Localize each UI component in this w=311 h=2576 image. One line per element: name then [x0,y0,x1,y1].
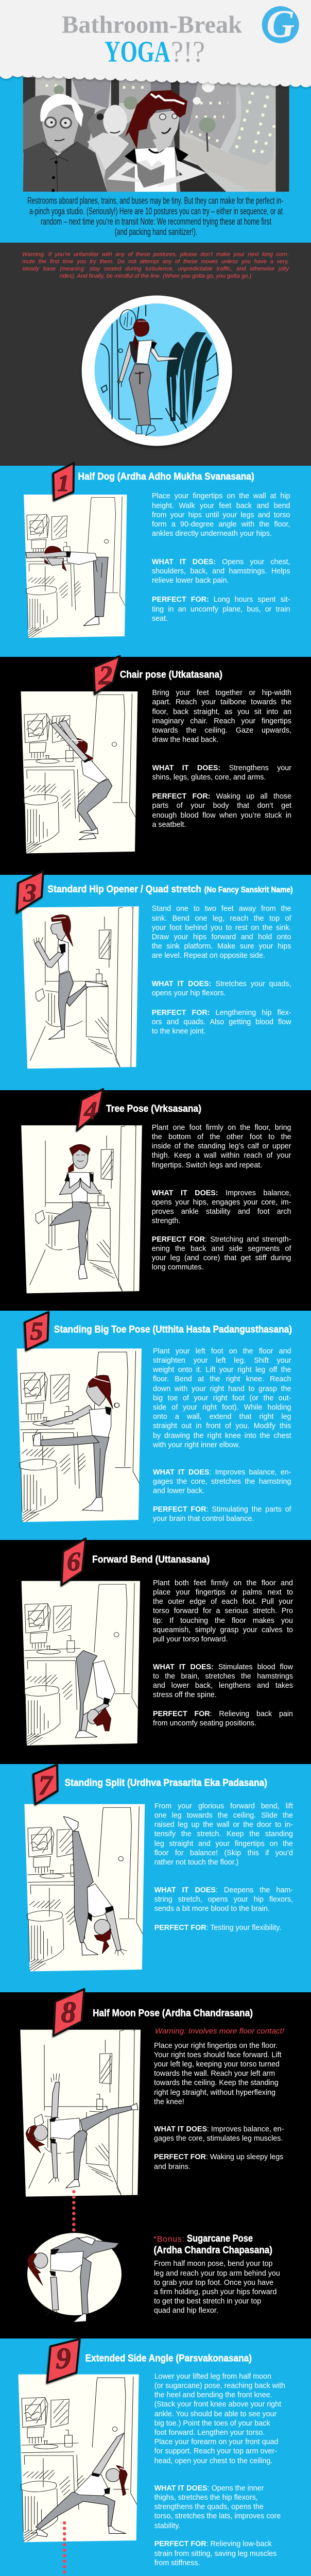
bonus instructions: to grab your top foot. Once you have [154,2279,273,2287]
instructions: your left leg, keeping your torso turned [154,2060,280,2069]
instructions: Plant both feet firmly on the floor and [153,1579,293,1587]
instructions: foot forward. Lengthen your torso. [154,2429,265,2437]
heading: Standard Hip Opener / Quad stretch [47,884,201,895]
instructions: torso forward for a serious stretch. Pro [153,1607,293,1615]
instructions [154,1802,293,1867]
panel: pose 7 standing split [0,1764,311,1992]
title: Bathroom-Break [62,11,242,39]
instructions: thigh. Keep a wall within reach of your [152,1151,291,1160]
perfect for: PERFECT FOR: Stretching and strength- [152,1235,291,1244]
instructions: floor. Bend at the right knee. Reach [153,1375,291,1383]
number tag 6 [61,1538,85,1585]
number tag 5 [25,1312,48,1350]
warning text [22,251,289,279]
instructions: squeamish, simply grasp your calves to [153,1626,293,1634]
intro paragraph: (and packing hand sanitizer!). [115,227,197,237]
perfect for: parts of your body that don’t get [152,802,291,810]
bonus instructions: quad and hip flexor. [154,2307,218,2315]
perfect for: your leg (and core) that get stiff during [152,1254,291,1262]
what it does: thighs, stretches the hip flexors, [154,2494,258,2502]
panel: pose 1 half dog [0,466,311,657]
instructions: Plant one foot firmly on the floor, bring [152,1124,291,1132]
what it does [153,1663,293,1699]
pose 6 illustration [22,1581,140,1745]
what it does [151,1189,291,1225]
number tag 4 [77,1089,103,1130]
what it does: WHAT IT DOES: Improves balance, en- [153,1468,291,1477]
what it does: WHAT IT DOES: Opens your chest, [152,558,290,566]
instructions: tip: If touching the floor makes you [153,1617,293,1625]
instructions: Draw your hips forward and hold onto [152,933,291,941]
what it does: gages the core, stretches the hamstring [153,1478,291,1486]
instructions: From your glorious forward bend, lift [154,1802,293,1810]
instructions: place your fingertips or palms next to [153,1588,293,1597]
number tag 9: 9 [56,2342,71,2375]
pose 2 artwork [21,655,222,853]
instructions [152,492,290,538]
what it does: WHAT IT DOES: Opens the inner [154,2484,264,2493]
pose 6 artwork [22,1537,210,1745]
number tag 2: 2 [98,661,112,690]
warning text: steady base (meaning: stay seated during turbulence, unpredictable traffic, and otherwise jolty [22,266,289,272]
what it does: opens your hips, engages your core, im- [152,1198,291,1207]
pose 8 artwork [20,1988,272,2323]
header artwork [0,0,311,90]
perfect for: PERFECT FOR: Relieving low-back [154,2540,272,2548]
perfect for: long commutes. [152,1263,204,1272]
perfect for: to the knee joint. [152,1027,206,1036]
number tag 9 [47,2339,80,2383]
instructions: the bottom of the other foot to the [152,1133,291,1141]
instructions [154,2041,281,2106]
perfect for: PERFECT FOR: Waking up sleepy legs [154,2153,283,2161]
what it does: shins, legs, glutes, core, and arms. [152,773,266,782]
warning text: Warning: If you’re unfamiliar with any of these postures, please don’t make your next long com- [22,251,289,258]
heading: (No Fancy Sanskrit Name) [204,886,293,894]
instructions: the outer edge of each foot. Pull your [153,1598,293,1606]
what it does: string stretch, opens your hip flexors, [154,1895,293,1904]
panel: pose 5 standing big toe [0,1311,311,1540]
perfect for: from uncomfy seating positions. [153,1719,256,1727]
instructions: the sink platform. Make sure your hips [152,942,291,951]
what it does: shoulders, back, and hamstrings. Helps [152,567,290,575]
perfect for [151,1235,291,1272]
instructions: fingertips. Switch legs and repeat. [152,1161,262,1170]
instructions: onto a wall, extend that right leg [153,1413,291,1421]
instructions: imaginary chair. Reach your fingertips [152,717,291,725]
instructions: towards the wall. Reach your left arm [154,2070,275,2078]
what it does [154,2125,284,2143]
pose 5 illustration [17,1349,142,1522]
instructions: straight out in front of you. Modify this [153,1422,291,1430]
instructions: Place your forearm on your front quad [154,2438,278,2446]
what it does: WHAT IT DOES: Deepens the ham- [154,1886,293,1894]
what it does: to the brain, stretches the hamstrings [153,1672,293,1681]
instructions: Lower your lifted leg from half moon [154,2372,271,2381]
perfect for [152,792,291,829]
what it does: stability. [154,2521,180,2530]
number tag 4: 4 [83,1096,97,1125]
instructions: towards the ceiling. Gaze upwards, [152,726,291,735]
instructions: Bring your feet together or hip-width [152,689,291,697]
perfect for: strain from sitting, saving leg muscles [154,2549,277,2557]
bonus instructions [154,2260,280,2315]
heading: Chair pose (Utkatasana) [120,669,222,681]
instructions: one leg towards the ceiling. Slide the [154,1811,293,1820]
heading: Extended Side Angle (Parsvakonasana) [85,2353,252,2364]
what it does: WHAT IT DOES: Improves balance, en- [154,2125,284,2133]
instructions: height. Walk your feet back and bend [152,502,290,510]
instructions: apart. Reach your tailbone towards the [152,698,291,706]
instructions [151,1124,291,1170]
instructions: head, open your chest to the ceiling. [154,2457,272,2465]
pose 4 illustration [21,1125,142,1293]
instructions: raised leg up the wall or the door to in- [154,1821,293,1829]
instructions: leg straight and your fingertips on the [154,1839,293,1848]
heading: Half Dog (Ardha Adho Mukha Svanasana) [78,471,254,482]
pose 8 illustration [20,2030,141,2197]
panel: pose 3 hip opener [0,875,311,1090]
perfect for: seat. [152,615,168,623]
pose 7 illustration [24,1804,145,1971]
what it does: and lower back, lengthens and takes [153,1682,293,1690]
perfect for: PERFECT FOR: Lengthening hip flex- [152,1009,291,1017]
hero illustration and intro text [23,75,289,237]
instructions: side of your right foot). While holding [153,1403,291,1412]
panel: pose 4 tree pose [0,1090,311,1311]
panel: intro [0,76,311,243]
number tag 8: 8 [61,1995,76,2029]
perfect for [153,1710,293,1727]
instructions: weight onto it. Lift your right leg off the [153,1366,291,1374]
instructions [151,905,291,960]
instructions: rather not touch the floor.) [154,1858,238,1867]
title: YOGA [105,35,170,69]
pose 9 artwork [18,2338,252,2576]
instructions: down with your right hand to grasp the [153,1385,291,1393]
what it does: stress off the spine. [153,1691,217,1699]
bonus instructions: a firm holding, push your hips forward [154,2288,277,2296]
panel: pose 6 forward bend [0,1540,311,1764]
number tag 3 [17,871,43,912]
bonus instructions: leg and reach your top arm behind you [154,2269,280,2278]
perfect for: PERFECT FOR: Long hours spent sit- [152,596,290,604]
dotted connector [63,2523,66,2576]
bonus heading: (Ardha Chandra Chapasana) [153,2245,272,2256]
instructions: the heel and bending the front knee. [154,2391,272,2399]
instructions: floor for balance! (Skip this if you’d [154,1849,293,1857]
heading [47,884,293,895]
what it does: strength. [152,1217,180,1225]
instructions: straighten your left leg. Shift your [153,1357,291,1365]
number tag 8 [54,1989,84,2036]
perfect for: ors and quads. Also getting blood flow [152,1018,291,1026]
instructions: tensify the stretch. Keep the standing [154,1830,293,1838]
perfect for: ting in an uncomfy plane, bus, or train [152,605,290,614]
instructions: (Stack your front knee above your right [154,2400,281,2409]
instructions: are level. Repeat on opposite side. [152,952,265,960]
pose 5 artwork [16,1311,292,1522]
pose 3 artwork [14,870,293,1069]
what it does: WHAT IT DOES: Improves balance, [152,1189,291,1197]
perfect for: from stiffness. [154,2559,200,2567]
panel: warning and aisle illustration [0,243,311,466]
what it does: torso, stretches the lats, improves core [154,2512,281,2520]
title: ?!? [171,35,205,69]
instructions: by drawing the right knee into the chest [153,1432,291,1440]
number tag 6: 6 [67,1547,80,1577]
what it does: proves ankle stability and foot arch [152,1208,291,1216]
perfect for: ening the back and side segments of [152,1245,291,1253]
instructions: floor, back straight, as you sit into an [152,708,291,716]
pose 7 artwork [24,1764,267,1971]
instructions: with your right inner elbow. [153,1441,240,1449]
instructions: form a 90-degree angle with the floor, [152,520,290,529]
perfect for: PERFECT FOR: Testing your flexibility. [154,1924,281,1932]
bonus heading [153,2233,272,2256]
perfect for [153,1505,291,1523]
what it does: sends a bit more blood to the brain. [154,1905,270,1913]
hero illustration: passengers on a bus [23,74,289,192]
bonus instructions: to get the best stretch in your top [154,2297,261,2306]
pose 3 illustration [22,906,139,1069]
instructions: Your right toes should face forward. Lift [154,2051,281,2059]
what it does: WHAT IT DOES: Stimulates blood flow [153,1663,293,1671]
instructions [153,1579,293,1643]
perfect for [152,596,290,623]
perfect for: enough blood flow when you’re stuck in [152,811,291,820]
instructions: big toe of your right foot (or the out- [153,1394,291,1402]
dotted connector [72,2192,76,2236]
instructions: right leg straight, without hyperflexing [154,2089,275,2097]
pose 1 artwork [24,462,254,638]
perfect for: PERFECT FOR: Waking up all those [152,792,291,801]
heading: Standing Split (Urdhva Prasarita Eka Padasana) [65,1777,267,1788]
panel: pose 8 half moon [0,1992,311,2338]
heading: Forward Bend (Uttanasana) [92,1554,210,1565]
what it does: and lower back. [153,1487,204,1495]
instructions: pull your torso forward. [153,1635,228,1643]
warning text: mute the first time you try them. Do not attempt any of these moves unless you have a very, [22,259,289,265]
what it does: WHAT IT DOES: Stretches your quads, [152,980,291,988]
instructions: ankles directly underneath your hips. [152,530,272,538]
header banner with scalloped edge [0,0,311,90]
perfect for: your brain that control balance. [153,1515,254,1523]
warning text: rides). And finally, be mindful of the line. (When you gotta go, you gotta go.) [60,273,251,279]
heading: Tree Pose (Vrksasana) [106,1103,201,1114]
what it does: WHAT IT DOES: Strengthens your [152,764,291,772]
instructions: towards the ceiling. Keep the standing [154,2079,279,2087]
what it does: opens your hip flexors. [152,989,226,997]
what it does: relieve lower back pain. [152,577,229,585]
number tag 1 [53,463,74,500]
instructions: Place your right fingertips on the floor. [154,2041,278,2049]
instructions: Stand one to two feet away from the [152,905,291,913]
instructions: draw the head back. [152,736,218,744]
intro paragraph [27,196,283,237]
instructions: sink. Bend one leg, reach the top of [152,914,291,923]
instructions [153,1347,291,1449]
instructions: ankle. You should be able to see your [154,2410,277,2418]
instructions: big toe.) Point the toes of your back [154,2419,270,2428]
panel: pose 9 extended side angle [0,2338,311,2576]
bonus heading: *Bonus: [153,2235,184,2244]
pose 1 illustration [24,495,127,638]
number tag 3: 3 [23,878,36,907]
number tag 7 [33,1765,58,1804]
instructions: inside of the standing leg’s calf or upper [152,1142,291,1150]
what it does [152,558,290,585]
bonus heading: Sugarcane Pose [187,2233,253,2244]
what it does [154,2484,281,2531]
perfect for [154,2539,277,2568]
number tag 7: 7 [38,1770,54,1801]
instructions [152,689,291,744]
icon: Greatist G badge: G [266,3,295,46]
woman walking down the aisle to the restroom [82,296,232,446]
number tag 5: 5 [30,1316,43,1345]
bonus instructions: From half moon pose, bend your top [154,2260,272,2268]
what it does: gages the core, stimulates leg muscles. [154,2134,283,2143]
perfect for: PERFECT FOR: Relieving back pain [153,1710,293,1718]
warning note: Warning: Involves more floor contact! [155,2027,284,2036]
number tag 2 [94,656,120,694]
panel: pose 2 chair pose [0,657,311,875]
instructions: (or sugarcane) pose, reaching back with [154,2382,285,2390]
perfect for [151,1009,291,1036]
instructions: from your hips until your legs and torso [152,511,290,519]
perfect for [154,2153,283,2171]
cloud shape [0,0,311,87]
heading: Half Moon Pose (Ardha Chandrasana) [93,2008,253,2019]
perfect for: PERFECT FOR: Stimulating the parts of [153,1505,291,1514]
instructions: for support. Reach your top arm over- [154,2447,277,2455]
what it does [151,980,291,997]
instructions: Plant your left foot on the floor and [153,1347,291,1355]
number tag 1: 1 [58,470,69,496]
instructions: your foot behind you to rest on the sink. [152,924,291,932]
pose 4 artwork [21,1088,201,1293]
perfect for: and brains. [154,2163,191,2171]
perfect for: a seatbelt. [152,821,186,829]
pose 9 illustration [18,2375,139,2542]
title [62,11,242,69]
instructions: the knee! [154,2098,184,2106]
what it does [152,764,291,782]
what it does [154,1886,293,1913]
what it does [153,1468,291,1495]
pose 2 illustration [21,691,137,853]
what it does: strengthens the quads, opens the [154,2503,264,2511]
instructions: Place your fingertips on the wall at hip [152,492,290,500]
bonus sugarcane illustration [27,2233,122,2322]
instructions [154,2372,285,2465]
circular illustration [81,296,233,448]
